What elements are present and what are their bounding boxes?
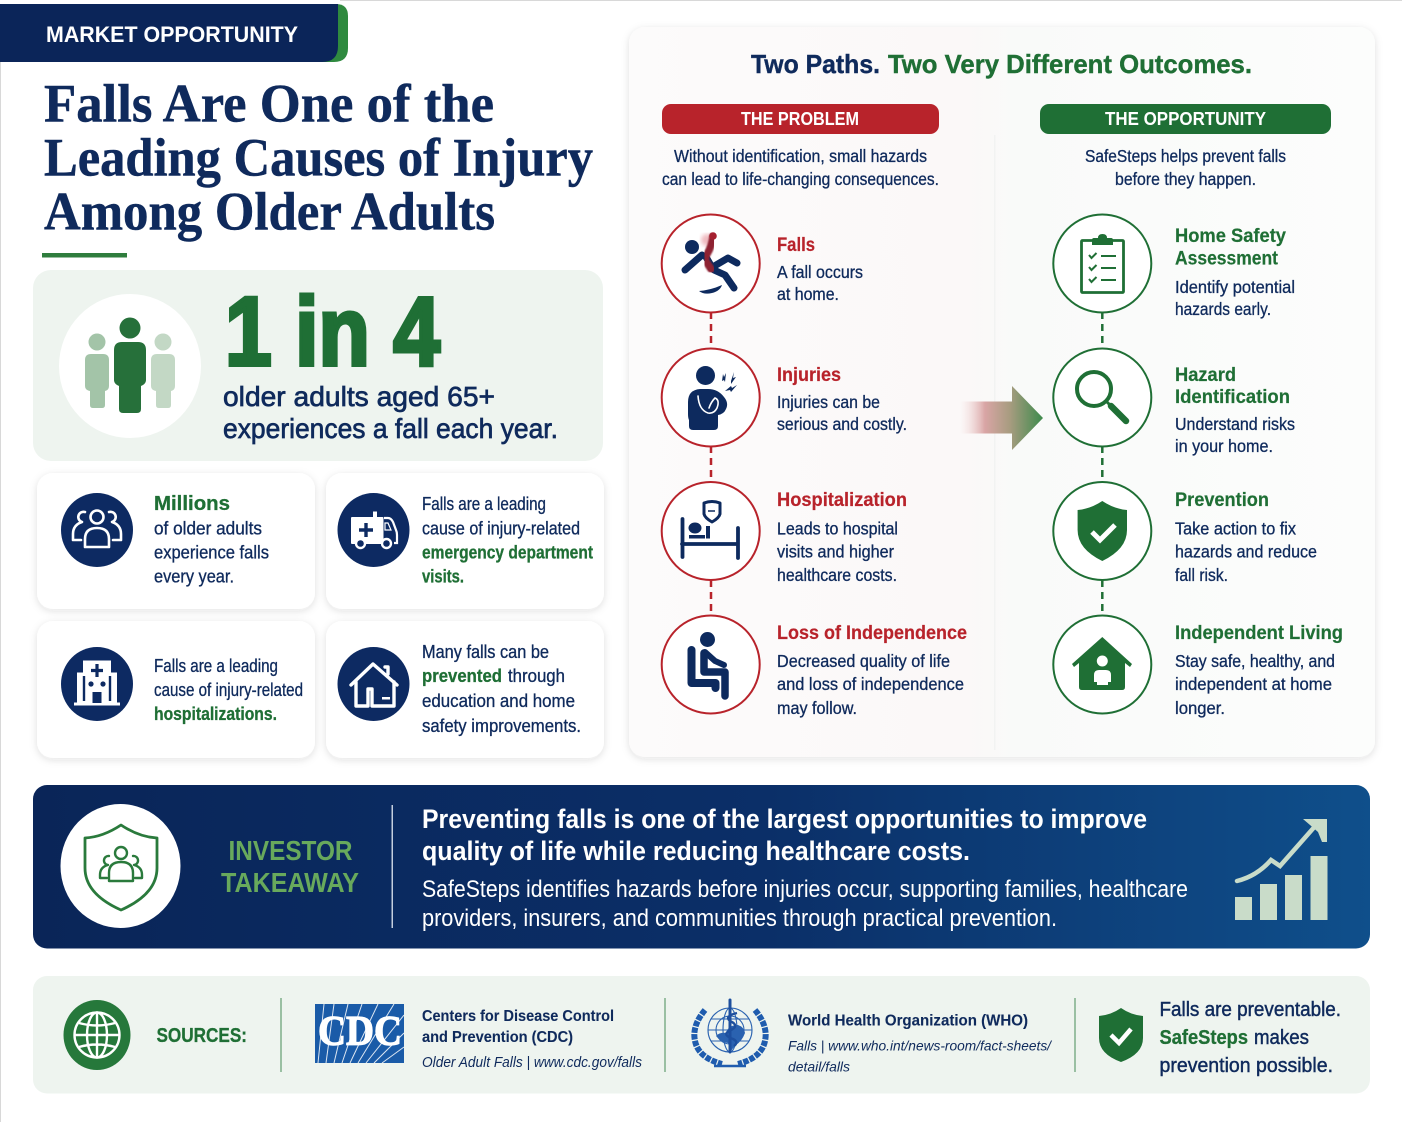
- source: CDC: Older Adult Falls | www.cdc.gov/falls: [422, 1055, 642, 1071]
- text: [1175, 623, 1343, 718]
- icon: person falling: [662, 214, 760, 312]
- text: independent at home: [1175, 674, 1332, 694]
- step: loss of independence: [662, 616, 967, 718]
- label: investor takeaway: TAKEAWAY: [221, 867, 359, 898]
- card: emergency department: [326, 473, 604, 609]
- icon: magnifying glass: [1053, 348, 1151, 446]
- text: cause of injury-related: [422, 518, 580, 538]
- icon: seated person: [662, 616, 760, 714]
- text: Falls are a leading: [154, 656, 278, 676]
- card: millions: [37, 473, 315, 609]
- text: experience falls: [154, 542, 269, 562]
- column: the opportunity: [1040, 104, 1343, 718]
- arrow: problem to opportunity: [960, 386, 1043, 450]
- problem intro: can lead to life-changing consequences.: [662, 169, 939, 189]
- text: of older adults: [154, 518, 262, 538]
- takeaway headline: [422, 804, 1147, 866]
- icon: ambulance: [338, 493, 410, 567]
- text: emergency department: [422, 542, 593, 562]
- text: [422, 642, 581, 736]
- text: serious and costly.: [777, 414, 907, 434]
- text: Injuries: [777, 365, 841, 386]
- text: education and home: [422, 691, 575, 711]
- text: Millions: [154, 493, 230, 515]
- card: prevention: [326, 621, 604, 758]
- text: [1175, 365, 1295, 456]
- icon: house: [338, 647, 410, 721]
- source: CDC: [422, 1008, 642, 1071]
- title: Falls Are One of the: [44, 74, 494, 134]
- text: [1175, 226, 1295, 319]
- text: safety improvements.: [422, 716, 581, 736]
- icon: shield check: [1099, 1008, 1143, 1062]
- text: [777, 623, 967, 718]
- text: Many falls can be: [422, 642, 549, 662]
- title: [44, 74, 593, 242]
- tag: market opportunity: [0, 4, 348, 62]
- takeaway headline: quality of life while reducing healthcare costs.: [422, 836, 970, 866]
- text: Loss of Independence: [777, 623, 967, 644]
- text: visits.: [422, 566, 464, 586]
- source: WHO: Falls | www.who.int/news-room/fact-sheets/: [788, 1038, 1053, 1054]
- text: [1175, 490, 1317, 585]
- panel: sources: [33, 976, 1370, 1094]
- text: visits and higher: [777, 542, 894, 562]
- step: home safety assessment: [1053, 214, 1295, 319]
- icon: shield with people: [60, 804, 180, 928]
- opportunity intro: [1085, 146, 1286, 189]
- text: Hazard: [1175, 365, 1236, 386]
- text: Identification: [1175, 387, 1290, 408]
- text: [777, 365, 907, 434]
- problem intro: Without identification, small hazards: [674, 146, 927, 166]
- text: cause of injury-related: [154, 680, 303, 700]
- text: Decreased quality of life: [777, 651, 950, 671]
- panel heading: Two Paths.: [751, 49, 880, 79]
- label: investor takeaway: [221, 835, 359, 898]
- text: in your home.: [1175, 436, 1273, 456]
- title: Among Older Adults: [44, 182, 495, 242]
- pill: the problem: THE PROBLEM: [741, 109, 859, 129]
- source: WHO: [788, 1012, 1053, 1074]
- big number: 1 in 4: [225, 277, 440, 386]
- opportunity intro: before they happen.: [1115, 169, 1256, 189]
- text: through: [508, 666, 565, 686]
- text: Understand risks: [1175, 414, 1295, 434]
- text: Stay safe, healthy, and: [1175, 651, 1335, 671]
- card: hospitalizations: [37, 621, 315, 758]
- source: CDC: and Prevention (CDC): [422, 1029, 573, 1046]
- text: Identify potential: [1175, 277, 1295, 297]
- closing statement: [1160, 999, 1341, 1077]
- icon: rising bar chart: [1235, 819, 1328, 920]
- text: Take action to fix: [1175, 518, 1296, 538]
- source: WHO: World Health Organization (WHO): [788, 1012, 1028, 1030]
- text: hospitalizations.: [154, 704, 277, 724]
- closing statement: makes: [1254, 1027, 1309, 1049]
- text: Hospitalization: [777, 490, 907, 511]
- text: [154, 493, 269, 586]
- panel: investor takeaway: [33, 785, 1370, 948]
- text: every year.: [154, 566, 234, 586]
- text: Assessment: [1175, 248, 1279, 270]
- text: at home.: [777, 284, 839, 304]
- problem intro: [662, 146, 939, 189]
- step: hazard identification: [1053, 348, 1295, 456]
- text: [154, 656, 303, 724]
- takeaway body: SafeSteps identifies hazards before injuries occur, supporting families, healthcare: [422, 876, 1188, 903]
- statistic caption: older adults aged 65+: [223, 381, 495, 412]
- closing statement: Falls are preventable.: [1160, 999, 1341, 1021]
- text: hazards early.: [1175, 299, 1271, 319]
- icon: globe: [64, 1000, 130, 1070]
- source: WHO: detail/falls: [788, 1058, 850, 1074]
- opportunity intro: SafeSteps helps prevent falls: [1085, 146, 1286, 166]
- statistic caption: [223, 381, 558, 444]
- icon: house with person: [1053, 616, 1151, 714]
- step: injuries: [662, 348, 907, 446]
- text: healthcare costs.: [777, 565, 897, 585]
- text: prevented: [422, 666, 502, 686]
- text: Independent Living: [1175, 623, 1343, 644]
- step: falls: [662, 214, 863, 312]
- title: Leading Causes of Injury: [44, 128, 593, 188]
- text: longer.: [1175, 698, 1225, 718]
- pill: the opportunity: THE OPPORTUNITY: [1105, 109, 1266, 129]
- text: [422, 494, 593, 586]
- icon: injured person: [662, 348, 760, 446]
- text: Leads to hospital: [777, 518, 898, 538]
- text: may follow.: [777, 698, 857, 718]
- takeaway body: [422, 876, 1188, 932]
- icon: three people: [59, 294, 201, 438]
- pill: the opportunity: [1040, 104, 1331, 134]
- icon: hospital: [61, 647, 133, 721]
- text: fall risk.: [1175, 565, 1228, 585]
- label: investor takeaway: INVESTOR: [228, 835, 352, 866]
- panel: 1 in 4 statistic: [33, 270, 603, 461]
- text: [777, 490, 907, 585]
- statistic caption: experiences a fall each year.: [223, 413, 558, 444]
- icon: shield with check: [1053, 482, 1151, 580]
- closing statement: SafeSteps: [1160, 1027, 1248, 1049]
- panel: two paths: [629, 27, 1375, 757]
- text: and loss of independence: [777, 674, 964, 694]
- icon: group of people: [61, 493, 133, 567]
- text: Injuries can be: [777, 392, 880, 412]
- takeaway headline: Preventing falls is one of the largest opportunities to improve: [422, 804, 1147, 834]
- text: A fall occurs: [777, 262, 863, 282]
- closing statement: prevention possible.: [1160, 1055, 1333, 1077]
- sources label: SOURCES:: [156, 1025, 247, 1047]
- tag: market opportunity: MARKET OPPORTUNITY: [46, 22, 298, 47]
- text: hazards and reduce: [1175, 542, 1317, 562]
- logo: WHO: [694, 1000, 766, 1066]
- pill: the problem: [662, 104, 939, 134]
- text: Prevention: [1175, 490, 1269, 511]
- icon: clipboard: [1053, 214, 1151, 312]
- step: independent living: [1053, 616, 1343, 718]
- text: Falls: [777, 235, 815, 256]
- column: the problem: [662, 104, 967, 718]
- step: prevention: [1053, 482, 1317, 585]
- takeaway body: providers, insurers, and communities through practical prevention.: [422, 905, 1057, 932]
- icon: hospital bed: [662, 482, 760, 580]
- text: Falls are a leading: [422, 494, 546, 514]
- logo: CDC: CDC: [318, 1009, 402, 1055]
- source: CDC: Centers for Disease Control: [422, 1008, 614, 1025]
- text: Home Safety: [1175, 226, 1286, 247]
- panel heading: Two Very Different Outcomes.: [888, 49, 1252, 79]
- step: hospitalization: [662, 482, 907, 585]
- text: [777, 235, 863, 304]
